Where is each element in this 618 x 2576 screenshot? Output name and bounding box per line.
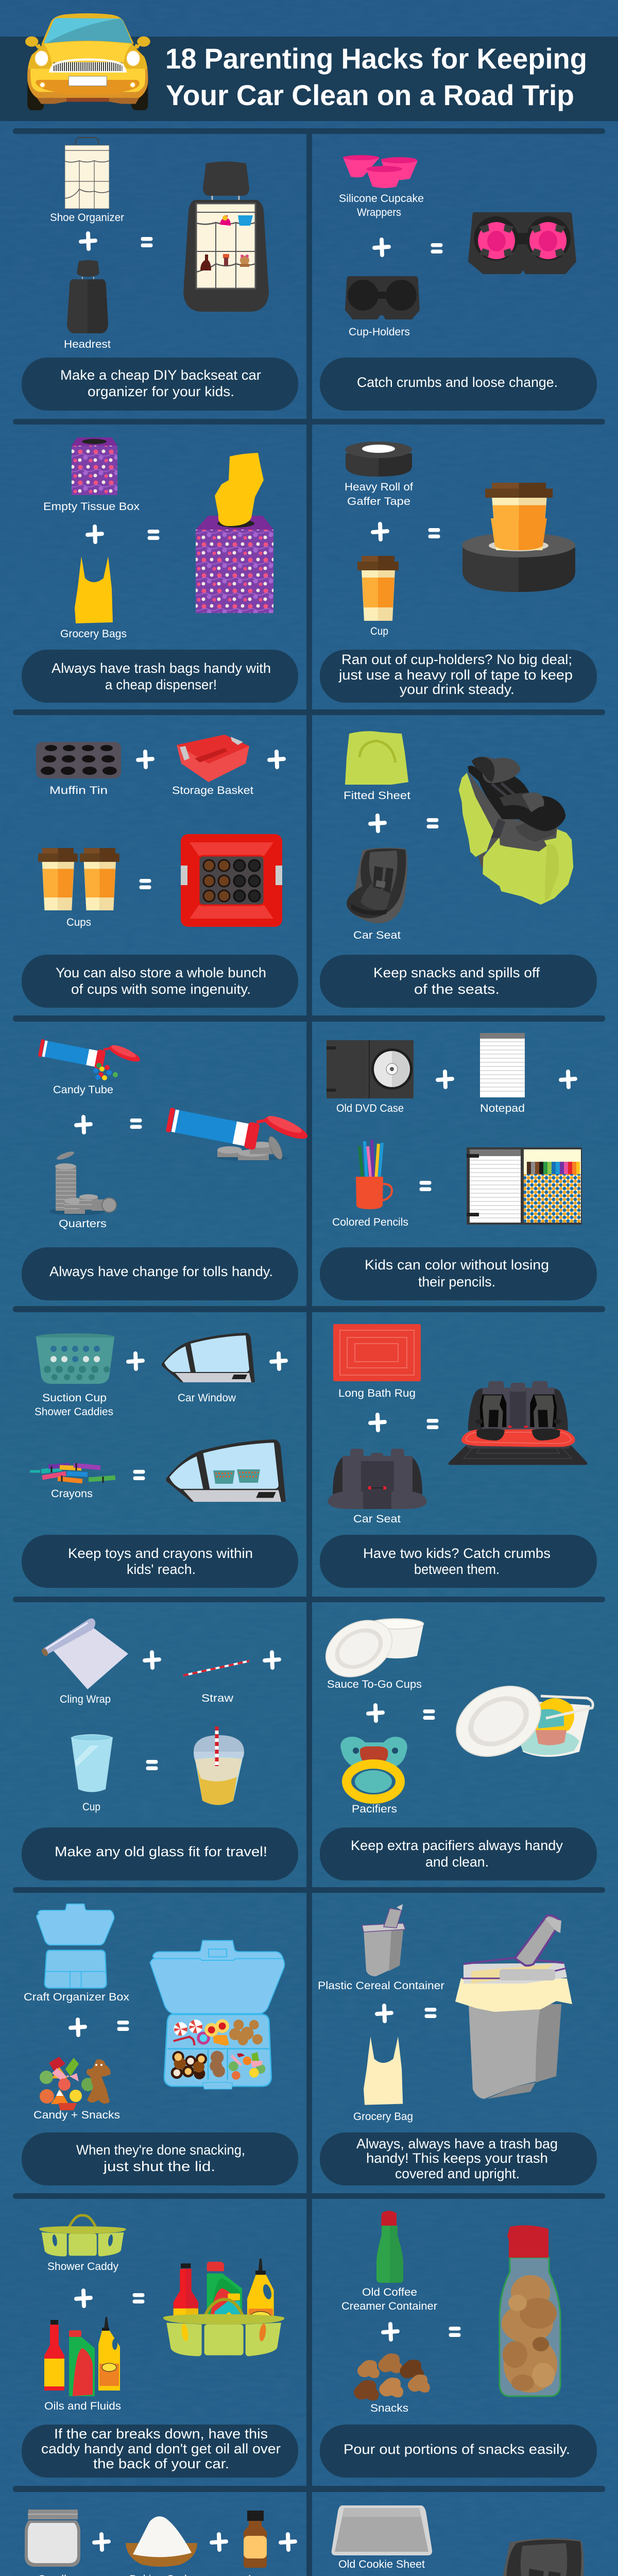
icon: crayons — [30, 1463, 115, 1483]
caption pill: If the car breaks down, have this — [54, 2426, 268, 2442]
label: Shower Caddies — [35, 1406, 113, 1418]
label: Long Bath Rug — [338, 1387, 416, 1399]
icon: yellow car — [25, 13, 150, 110]
caption pill: your drink steady. — [400, 682, 514, 697]
caption pill — [320, 955, 597, 1008]
label: Old Coffee — [362, 2286, 417, 2298]
caption pill: Make a cheap DIY backseat car — [60, 367, 261, 383]
plus sign — [138, 752, 152, 767]
caption pill: Have two kids? Catch crumbs — [363, 1546, 551, 1561]
icon: colored pencils — [356, 1140, 392, 1209]
icon: cereal container trash bin — [455, 1916, 572, 2099]
equals sign — [419, 1181, 432, 1191]
icon: candy tube — [38, 1029, 143, 1080]
equals sign — [428, 528, 440, 538]
icon: dvd case — [327, 1040, 414, 1098]
panel: trash bag dispenser — [22, 437, 298, 703]
icon: cookie sheet — [332, 2505, 432, 2555]
caption pill: organizer for your kids. — [88, 384, 234, 399]
equals sign — [133, 1470, 145, 1480]
label: Cups — [66, 917, 91, 928]
label — [339, 193, 424, 218]
icon: wrapped glass — [194, 1726, 244, 1805]
plus sign — [370, 816, 385, 831]
label: Oils and Fluids — [44, 2400, 121, 2412]
label: Quarters — [59, 1218, 107, 1230]
icon: two cups — [38, 848, 119, 910]
label: Old DVD Case — [336, 1103, 404, 1114]
title: Your Car Clean on a Road Trip — [166, 79, 574, 111]
icon: coffee cup — [357, 556, 399, 621]
caption pill: Kids can color without losing — [365, 1257, 549, 1273]
label: Wrappers — [357, 207, 401, 218]
plus sign — [368, 1705, 383, 1721]
caption pill: When they're done snacking, — [76, 2142, 245, 2158]
plus sign — [81, 233, 95, 249]
label: Candy + Snacks — [33, 2109, 120, 2121]
panel: muffin tin cup carrier — [22, 735, 298, 1008]
icon: seat with organizer — [183, 162, 269, 312]
caption pill: You can also store a whole bunch — [56, 965, 266, 980]
panel: sauce cup pacifiers — [316, 1609, 597, 1880]
icon: glass cup — [71, 1734, 113, 1792]
icon: cup holders — [345, 276, 420, 319]
icon: cream grocery bag — [364, 2037, 403, 2105]
icon: car seat with sheet — [459, 757, 573, 905]
plus sign — [76, 2291, 91, 2306]
icon: grocery bag — [75, 556, 113, 623]
caption pill: their pencils. — [418, 1274, 495, 1290]
icon: seats with rug — [449, 1381, 587, 1465]
label: Silicone Cupcake — [339, 193, 424, 205]
icon: mason jar — [25, 2510, 80, 2567]
equals sign — [426, 1419, 439, 1429]
caption pill — [320, 1247, 597, 1300]
caption pill: just use a heavy roll of tape to keep — [338, 667, 573, 683]
caption pill: Always have change for tolls handy. — [49, 1264, 273, 1279]
label: Straw — [201, 1692, 234, 1704]
icon: baking soda — [126, 2516, 197, 2567]
icon: storage basket — [177, 735, 249, 782]
icon: cup holders with wrappers — [468, 212, 576, 274]
equals sign — [146, 1760, 158, 1770]
plus sign — [265, 1652, 279, 1668]
caption pill: Always have trash bags handy with — [52, 660, 271, 676]
equals sign — [141, 237, 152, 247]
label: Cup — [370, 625, 388, 637]
icon: muffin tin — [36, 742, 121, 778]
label: Old Cookie Sheet — [338, 2558, 425, 2570]
plus sign — [212, 2534, 226, 2550]
icon: quarters — [49, 1150, 116, 1215]
icon: back seat — [328, 1449, 427, 1509]
label: Heavy Roll of — [345, 481, 413, 493]
equals sign — [117, 2021, 129, 2031]
panel: coffee creamer snacks — [320, 2211, 597, 2478]
plus sign — [561, 1072, 575, 1087]
plus sign — [128, 1353, 143, 1369]
title — [165, 42, 587, 111]
plus sign — [370, 1415, 385, 1430]
icon: straw — [183, 1661, 249, 1675]
equals sign — [449, 2327, 460, 2337]
equals sign — [147, 530, 160, 540]
plus sign — [145, 1652, 159, 1668]
caption pill — [320, 2425, 597, 2478]
plus sign — [374, 240, 389, 255]
label — [345, 481, 413, 507]
icon: snacks — [354, 2353, 430, 2401]
equals sign — [426, 818, 439, 828]
caption pill — [22, 1827, 298, 1880]
caption pill — [320, 2132, 597, 2185]
icon: empty tissue box — [72, 437, 117, 495]
caption pill: kids' reach. — [127, 1562, 196, 1577]
panel: shower caddies on window — [22, 1333, 298, 1588]
caption pill: Catch crumbs and loose change. — [357, 375, 558, 390]
caption pill — [22, 1247, 298, 1300]
label: Pacifiers — [352, 1803, 397, 1815]
caption pill — [22, 650, 298, 703]
label: Cling Wrap — [60, 1693, 111, 1705]
plus sign — [94, 2534, 109, 2550]
icon: cup in tape — [462, 483, 575, 592]
label: Grocery Bags — [60, 628, 127, 640]
icon: window with caddies — [166, 1439, 286, 1502]
icon: cereal container — [362, 1904, 405, 1976]
label: Suction Cup — [42, 1392, 107, 1404]
icon: gaffer tape — [345, 442, 412, 477]
equals sign — [424, 2008, 437, 2018]
icon: cups in basket — [181, 834, 282, 927]
icon: essential oil — [244, 2511, 267, 2568]
plus sign — [71, 2020, 85, 2035]
plus sign — [271, 1353, 286, 1369]
label: Snacks — [370, 2402, 408, 2414]
caption pill: between them. — [414, 1562, 500, 1577]
caption pill — [320, 650, 597, 703]
icon: suction caddy — [36, 1333, 115, 1384]
label: Car Seat — [353, 1513, 401, 1525]
panel: gaffer tape cup holder — [320, 442, 597, 703]
title: 18 Parenting Hacks for Keeping — [165, 42, 587, 75]
panel: craft box snacks — [22, 1904, 298, 2185]
label: Gaffer Tape — [347, 496, 410, 507]
panel: cereal container trash bin — [318, 1904, 597, 2185]
label: Muffin Tin — [49, 785, 108, 796]
label: Creamer Container — [341, 2300, 437, 2312]
caption pill: a cheap dispenser! — [105, 677, 217, 692]
icon: notepad — [480, 1033, 525, 1097]
panel: fitted sheet car seat — [320, 731, 597, 1008]
label: Car Seat — [353, 929, 401, 941]
caption pill — [320, 1535, 597, 1588]
icon: shoe organizer — [65, 138, 109, 209]
caption pill: and clean. — [425, 1854, 489, 1870]
label: Sauce To-Go Cups — [327, 1679, 422, 1690]
caption pill: Make any old glass fit for travel! — [55, 1844, 267, 1859]
caption pill: caddy handy and don't get oil all over — [41, 2441, 281, 2456]
panel: bath rug between seats — [320, 1324, 597, 1588]
caption pill — [320, 1827, 597, 1880]
plus sign — [76, 1117, 91, 1132]
caption pill: Pour out portions of snacks easily. — [344, 2442, 570, 2457]
icon: shower caddy — [39, 2215, 126, 2257]
plus sign — [383, 2324, 398, 2340]
panel: backseat organizer — [22, 138, 298, 411]
caption pill: Keep snacks and spills off — [373, 965, 540, 980]
caption pill: just shut the lid. — [103, 2159, 215, 2174]
label: Notepad — [480, 1103, 525, 1114]
icon: car seat — [347, 848, 407, 923]
caption pill — [22, 2425, 298, 2478]
panel: diy air freshener — [22, 2510, 298, 2576]
icon: bath rug — [333, 1324, 421, 1381]
label: Shower Caddy — [47, 2261, 118, 2273]
plus sign — [269, 752, 284, 767]
icon: tissue box dispenser — [196, 453, 273, 613]
caption pill — [320, 358, 597, 411]
caption pill: of the seats. — [414, 981, 500, 997]
plus sign — [377, 2006, 391, 2021]
caption pill — [22, 955, 298, 1008]
caption pill: the back of your car. — [93, 2456, 229, 2471]
icon: pacifier — [340, 1737, 407, 1799]
icon: cupcake wrappers — [343, 155, 418, 188]
icon: car seat with tray — [466, 2538, 584, 2576]
caption pill: handy! This keeps your trash — [366, 2150, 548, 2166]
panel: candy tube quarters — [22, 1029, 312, 1300]
plus sign — [281, 2534, 295, 2550]
icon: car window — [162, 1333, 255, 1382]
icon: pacifiers in sauce cup — [444, 1672, 593, 1770]
icon: creamer jar with snacks — [500, 2225, 560, 2396]
label: Cup-Holders — [349, 326, 410, 338]
plus sign — [438, 1072, 452, 1087]
panel: cupcake cup holders — [320, 155, 597, 411]
icon: headrest — [67, 260, 108, 333]
icon: oils and fluids — [44, 2317, 120, 2396]
icon: candy and snacks — [40, 2057, 111, 2110]
caption pill: of cups with some ingenuity. — [71, 981, 251, 997]
panel: dvd case pencils — [320, 1033, 597, 1300]
caption pill — [22, 358, 298, 411]
equals sign — [431, 243, 443, 253]
equals sign — [130, 1118, 142, 1129]
icon: cling wrap — [41, 1618, 128, 1689]
label: Colored Pencils — [332, 1216, 408, 1228]
plus sign — [88, 527, 102, 542]
caption pill: Always, always have a trash bag — [356, 2136, 558, 2151]
equals sign — [133, 2293, 144, 2303]
label: Shoe Organizer — [50, 212, 124, 224]
icon: craft organizer box — [37, 1904, 114, 1988]
panel: cookie sheet tray — [320, 2505, 597, 2576]
panel: caddy oils fluids — [22, 2215, 298, 2478]
caption pill — [22, 1535, 298, 1588]
icon: sauce cups — [316, 1609, 423, 1688]
label: Headrest — [64, 338, 111, 350]
icon: fitted sheet — [345, 731, 408, 785]
label: Cup — [82, 1801, 100, 1813]
label: Storage Basket — [172, 785, 253, 796]
label — [341, 2286, 437, 2312]
label: Grocery Bag — [353, 2111, 413, 2123]
caption pill: Keep toys and crayons within — [68, 1546, 253, 1561]
label: Car Window — [178, 1392, 236, 1404]
plus sign — [373, 524, 387, 539]
label: Craft Organizer Box — [24, 1991, 130, 2003]
label: Empty Tissue Box — [43, 501, 140, 513]
caption pill: Ran out of cup-holders? No big deal; — [341, 652, 572, 667]
title banner — [0, 37, 618, 121]
caption pill: Keep extra pacifiers always handy — [351, 1838, 563, 1853]
label: Fitted Sheet — [344, 790, 410, 802]
icon: tube with quarters — [165, 1094, 312, 1161]
label: Candy Tube — [53, 1084, 113, 1096]
panel: cling wrap travel cup — [22, 1618, 298, 1880]
icon: filled craft box — [150, 1941, 284, 2089]
label: Crayons — [51, 1488, 93, 1500]
icon: caddy with oils — [163, 2259, 284, 2356]
caption pill: covered and upright. — [395, 2166, 520, 2181]
label: Plastic Cereal Container — [318, 1980, 444, 1992]
caption pill — [22, 2132, 298, 2185]
equals sign — [139, 879, 151, 889]
equals sign — [423, 1709, 435, 1720]
icon: creamer bottle — [376, 2211, 403, 2283]
label — [35, 1392, 113, 1418]
icon: dvd case organizer — [467, 1147, 582, 1225]
